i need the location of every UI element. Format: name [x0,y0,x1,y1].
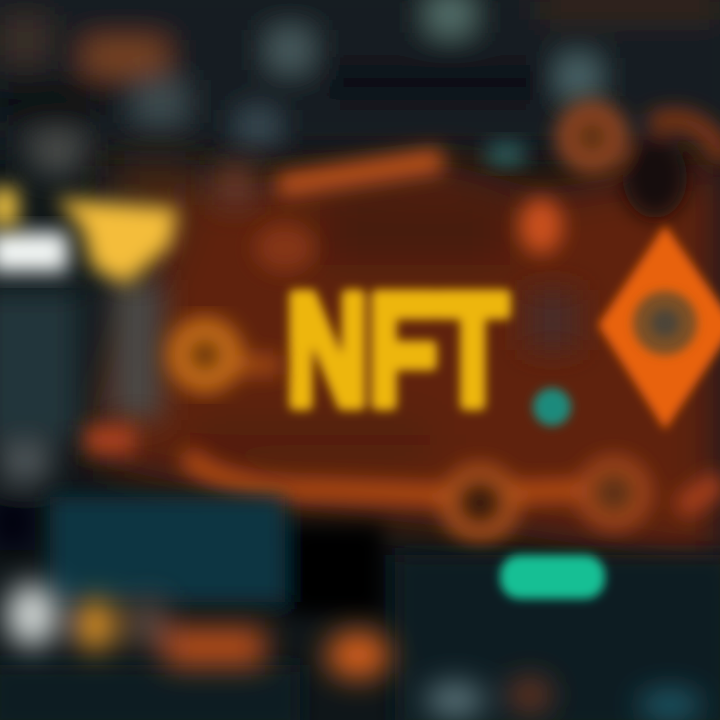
icon: orange dot [519,198,563,254]
top orange bar [255,148,445,272]
bottom dark panels [0,497,720,720]
left dark column [0,280,162,550]
bottom left lights [6,583,702,719]
title: NFT: NFT [286,263,508,438]
yellow glow top left [0,188,178,285]
panel detail: muted block [215,165,580,350]
icon: orange diamond [598,225,720,430]
icon: small teal [488,142,524,166]
green pill [500,555,605,599]
icon: top right ring [564,109,720,218]
icon: teal dot [533,388,571,426]
top dark texture [0,0,720,174]
white bar [0,232,68,272]
icon: left ring [178,328,280,382]
panel: rust circuit board [100,160,720,565]
bottom circuit line [85,425,720,535]
